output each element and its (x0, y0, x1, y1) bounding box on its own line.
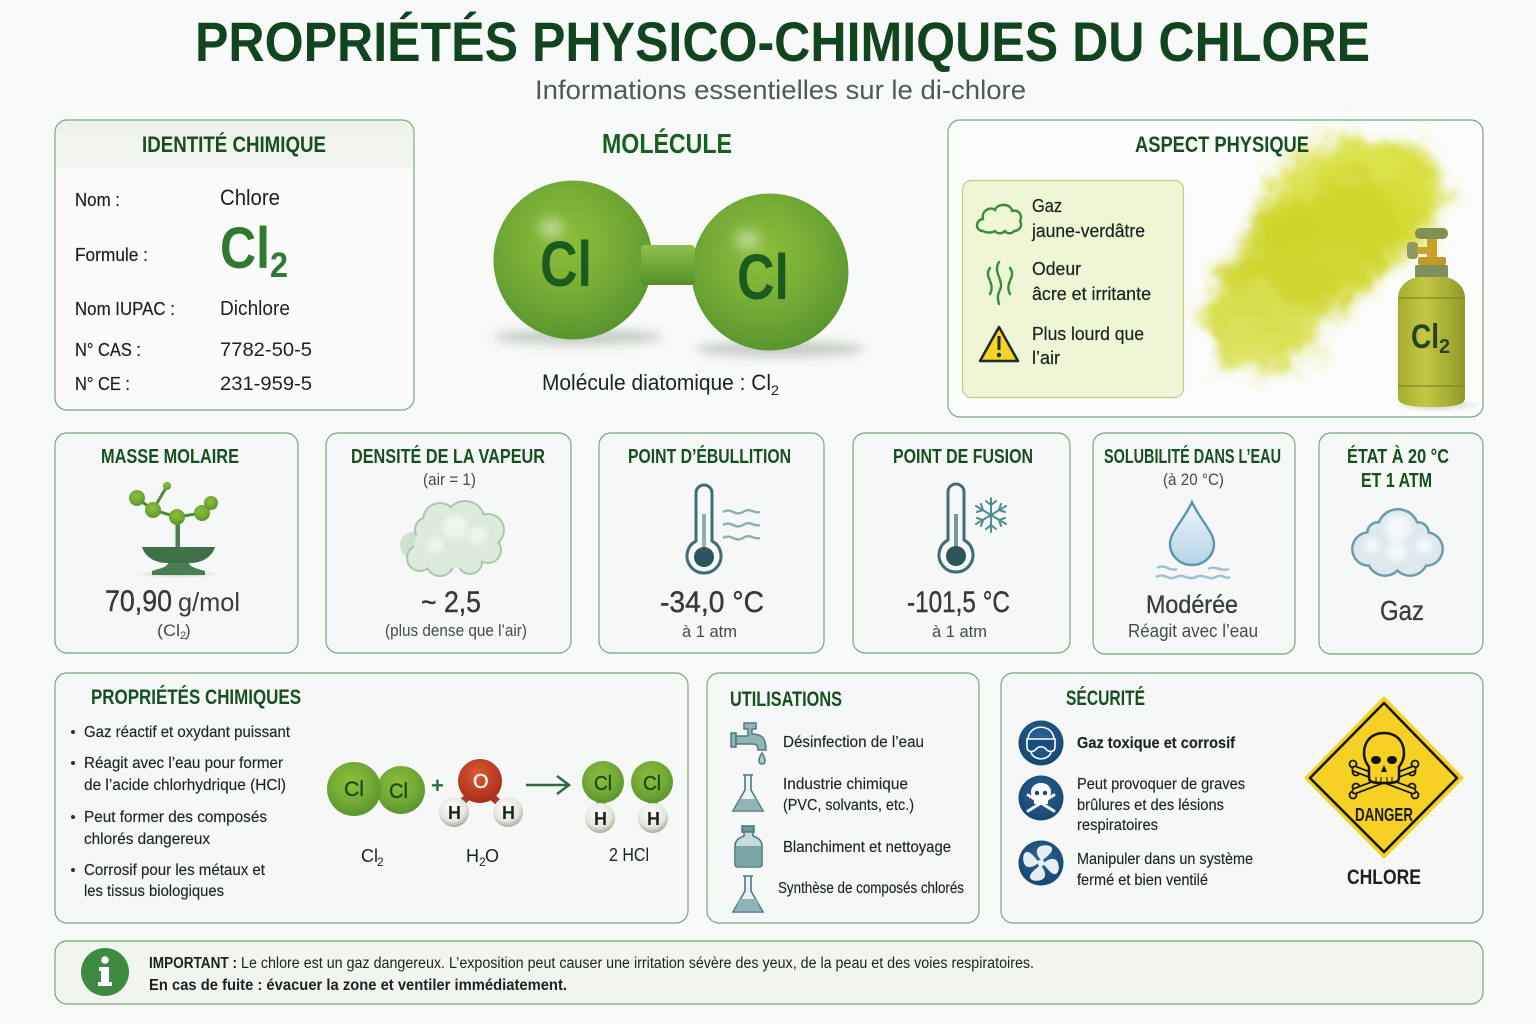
text: warning line 2: En cas de fuite : évacuer la zone et ventiler immédiatement. (149, 977, 567, 994)
2 HCl molecules: Cl (594, 773, 612, 795)
text: industrie chimique: Industrie chimique (783, 776, 908, 793)
danger sign (1306, 698, 1462, 857)
reaction diagram (327, 759, 673, 869)
text: gaz jaune-verdâtre: Gaz (1032, 196, 1062, 216)
label: Cl2: 2 (377, 855, 384, 869)
label: Cl2 (361, 846, 384, 869)
panel: solubilité dans l'eau (1093, 433, 1295, 654)
label: H2O: H (466, 846, 479, 866)
text: industrie chimique: (PVC, solvants, etc.) (783, 797, 914, 814)
panel: point d'ébullition (599, 433, 824, 653)
text: odeur âcre: Odeur (1032, 259, 1081, 279)
text: brûlures: brûlures et des lésions (1077, 797, 1224, 814)
danger sign: DANGER (1355, 805, 1413, 825)
icon: cloud outline (977, 205, 1021, 233)
heading: (air = 1) (423, 470, 476, 489)
heading: MASSE MOLAIRE (101, 446, 239, 468)
field: nom: Nom : (75, 190, 120, 210)
panel: utilisations (707, 673, 979, 923)
text: warning line 1: Le chlore est un gaz dangereux. L’exposition peut causer une irritation sévère des yeux, de la peau et des voies respiratoires. (241, 955, 1034, 972)
icon: thermometer with snowflake (939, 484, 1006, 572)
text: odeur âcre: âcre et irritante (1032, 284, 1151, 304)
heading: SOLUBILITÉ DANS L’EAU (1104, 445, 1281, 468)
title: PROPRIÉTÉS PHYSICO-CHIMIQUES DU CHLORE (195, 10, 1370, 73)
arrow (526, 776, 569, 794)
heading: POINT D’ÉBULLITION (628, 445, 791, 468)
label: chlore: CHLORE (1347, 866, 1421, 889)
bullet list: Gaz réactif et oxydant puissant (84, 724, 291, 741)
text: gaz toxique: Gaz toxique et corrosif (1077, 735, 1236, 752)
heading: ÉTAT À 20 °C (1347, 445, 1449, 468)
heading: (à 20 °C) (1163, 470, 1224, 489)
note: à 1 atm (932, 622, 987, 641)
Cl2 molecule (327, 762, 425, 816)
value: Gaz (1380, 595, 1424, 626)
field: nom: Chlore (220, 185, 280, 210)
icon: bottle (735, 826, 762, 867)
value (105, 585, 240, 618)
icon: ventilation fan (1018, 840, 1064, 886)
text: gaz jaune-verdâtre (1031, 196, 1145, 241)
value: ~ 2,5 (421, 586, 481, 619)
icon: water drop (1156, 502, 1230, 578)
icon: flask (733, 775, 763, 811)
icon: warning triangle (980, 327, 1018, 361)
bullet list: les tissus biologiques (84, 883, 224, 900)
field: nom iupac (75, 298, 290, 320)
text: plus lourd que l'air: Plus lourd que (1032, 324, 1144, 344)
panel: aspect physique (948, 120, 1483, 417)
note: ) (185, 621, 191, 640)
bullet list: chlorés dangereux (84, 831, 210, 848)
illustration: gas cylinder: Cl (1411, 318, 1439, 356)
label: H2O: 2 (479, 855, 486, 869)
H2O molecule: H (448, 803, 461, 823)
text: warning line 1: IMPORTANT : (149, 955, 237, 972)
H2O molecule (439, 759, 523, 827)
heading: DENSITÉ DE LA VAPEUR (351, 445, 545, 468)
note: (plus dense que l’air) (385, 621, 527, 640)
panel: sécurité (1001, 673, 1483, 923)
illustration: gas cylinder: 2 (1439, 336, 1450, 358)
icon: thermometer with heat waves (687, 485, 760, 573)
panel: densité de la vapeur (326, 433, 571, 653)
value: Modérée (1146, 591, 1238, 619)
icon: tap (731, 723, 766, 764)
panel: masse molaire (55, 433, 298, 653)
illustration: gas cloud (1202, 132, 1443, 374)
H2O molecule: O (473, 771, 489, 793)
note: (Cl (157, 621, 180, 640)
field: formule (75, 216, 288, 285)
value: -34,0 °C (660, 586, 764, 619)
Cl2 molecule: Cl (389, 780, 408, 803)
field: nom iupac: Nom IUPAC : (75, 299, 175, 319)
bullet list: Peut former des composés (84, 809, 267, 826)
heading: identité chimique: IDENTITÉ CHIMIQUE (142, 132, 326, 157)
text: gaz jaune-verdâtre: jaune-verdâtre (1031, 221, 1145, 241)
text: plus lourd que l'air: l’air (1032, 348, 1060, 368)
panel: point de fusion (853, 433, 1070, 653)
note: 2 (180, 630, 186, 642)
H2O molecule: H (502, 803, 515, 823)
text: manipuler: Manipuler dans un système (1077, 851, 1253, 868)
text: brûlures: respiratoires (1077, 817, 1158, 834)
plus sign: + (431, 773, 444, 798)
molecule illustration (493, 180, 865, 357)
text: blanchiment: Blanchiment et nettoyage (783, 839, 951, 856)
text: plus lourd que l'air (1032, 324, 1144, 368)
note: Réagit avec l’eau (1128, 621, 1258, 641)
text: odeur âcre (1032, 259, 1151, 304)
Cl2 molecule: Cl (344, 778, 364, 801)
text: manipuler: fermé et bien ventilé (1077, 872, 1208, 889)
field: nom (75, 185, 280, 210)
bullet list: Corrosif pour les métaux et (84, 862, 266, 879)
icon: flask (733, 876, 763, 912)
bullet list: Réagit avec l’eau pour former (84, 755, 284, 772)
panel: identité chimique (55, 120, 414, 410)
text: brûlures (1077, 776, 1245, 834)
panel: propriétés chimiques (55, 673, 688, 923)
field: numéro ce (75, 374, 312, 395)
icon: vapour cloud (400, 500, 505, 577)
icon: odour waves (988, 262, 1012, 304)
icon: cloud (1351, 508, 1444, 577)
text: manipuler (1077, 851, 1253, 889)
label: Cl2: Cl (361, 846, 378, 866)
2 HCl molecules: Cl (643, 773, 661, 795)
field: formule: Formule : (75, 245, 148, 265)
molecule illustration: Cl (737, 241, 789, 313)
icon: skull and crossbones (1350, 733, 1418, 798)
2 HCl molecules: H (594, 809, 607, 829)
bullet list: de l’acide chlorhydrique (HCl) (84, 777, 286, 794)
field: formule: 2 (270, 246, 288, 285)
2 HCl molecules (582, 761, 673, 833)
subtitle: Informations essentielles sur le di-chlore (535, 75, 1026, 105)
value: g/mol (178, 587, 240, 617)
bullet list (71, 724, 291, 900)
heading: POINT DE FUSION (893, 446, 1033, 468)
note: à 1 atm (682, 622, 737, 641)
icon: info (81, 948, 129, 996)
note (157, 621, 191, 642)
caption: molécule diatomique: Molécule diatomique : Cl (542, 370, 771, 395)
heading: PROPRIÉTÉS CHIMIQUES (91, 686, 301, 709)
label: 2 HCl: 2 HCl (609, 845, 649, 865)
field: numéro cas (75, 340, 312, 361)
text: industrie chimique (783, 776, 914, 814)
heading: UTILISATIONS (730, 688, 842, 711)
icon: skull on blue (1018, 776, 1064, 820)
molecule illustration: Cl (540, 228, 592, 300)
heading: SÉCURITÉ (1066, 687, 1145, 710)
2 HCl molecules: H (647, 809, 660, 829)
field: numéro ce: N° CE : (75, 374, 130, 394)
text: désinfection: Désinfection de l’eau (783, 734, 924, 751)
label: H2O: O (485, 846, 499, 866)
field: formule: Cl (220, 216, 270, 281)
heading (1347, 445, 1449, 492)
text: brûlures: Peut provoquer de graves (1077, 776, 1245, 793)
heading: molécule: MOLÉCULE (602, 128, 732, 159)
field: numéro cas: 7782-50-5 (220, 340, 312, 361)
label: H2O (466, 846, 499, 869)
value: -101,5 °C (907, 586, 1010, 619)
field: numéro ce: 231-959-5 (220, 374, 312, 395)
value: 70,90 (105, 585, 172, 618)
heading: ET 1 ATM (1361, 470, 1432, 492)
text: synthèse: Synthèse de composés chlorés (778, 880, 964, 897)
icon: molecule on balance (129, 482, 220, 578)
field: nom iupac: Dichlore (220, 298, 290, 320)
callout: appearance list (962, 180, 1184, 398)
icon: goggles (1018, 720, 1064, 766)
heading (351, 445, 545, 489)
heading: aspect physique: ASPECT PHYSIQUE (1135, 132, 1309, 157)
panel: important notice (55, 941, 1483, 1004)
illustration: gas cylinder (1393, 228, 1481, 412)
field: numéro cas: N° CAS : (75, 340, 141, 360)
caption: molécule diatomique: 2 (771, 382, 779, 398)
panel: état à 20 °C (1319, 433, 1483, 654)
panel: molécule (493, 128, 865, 398)
heading (1104, 445, 1281, 489)
